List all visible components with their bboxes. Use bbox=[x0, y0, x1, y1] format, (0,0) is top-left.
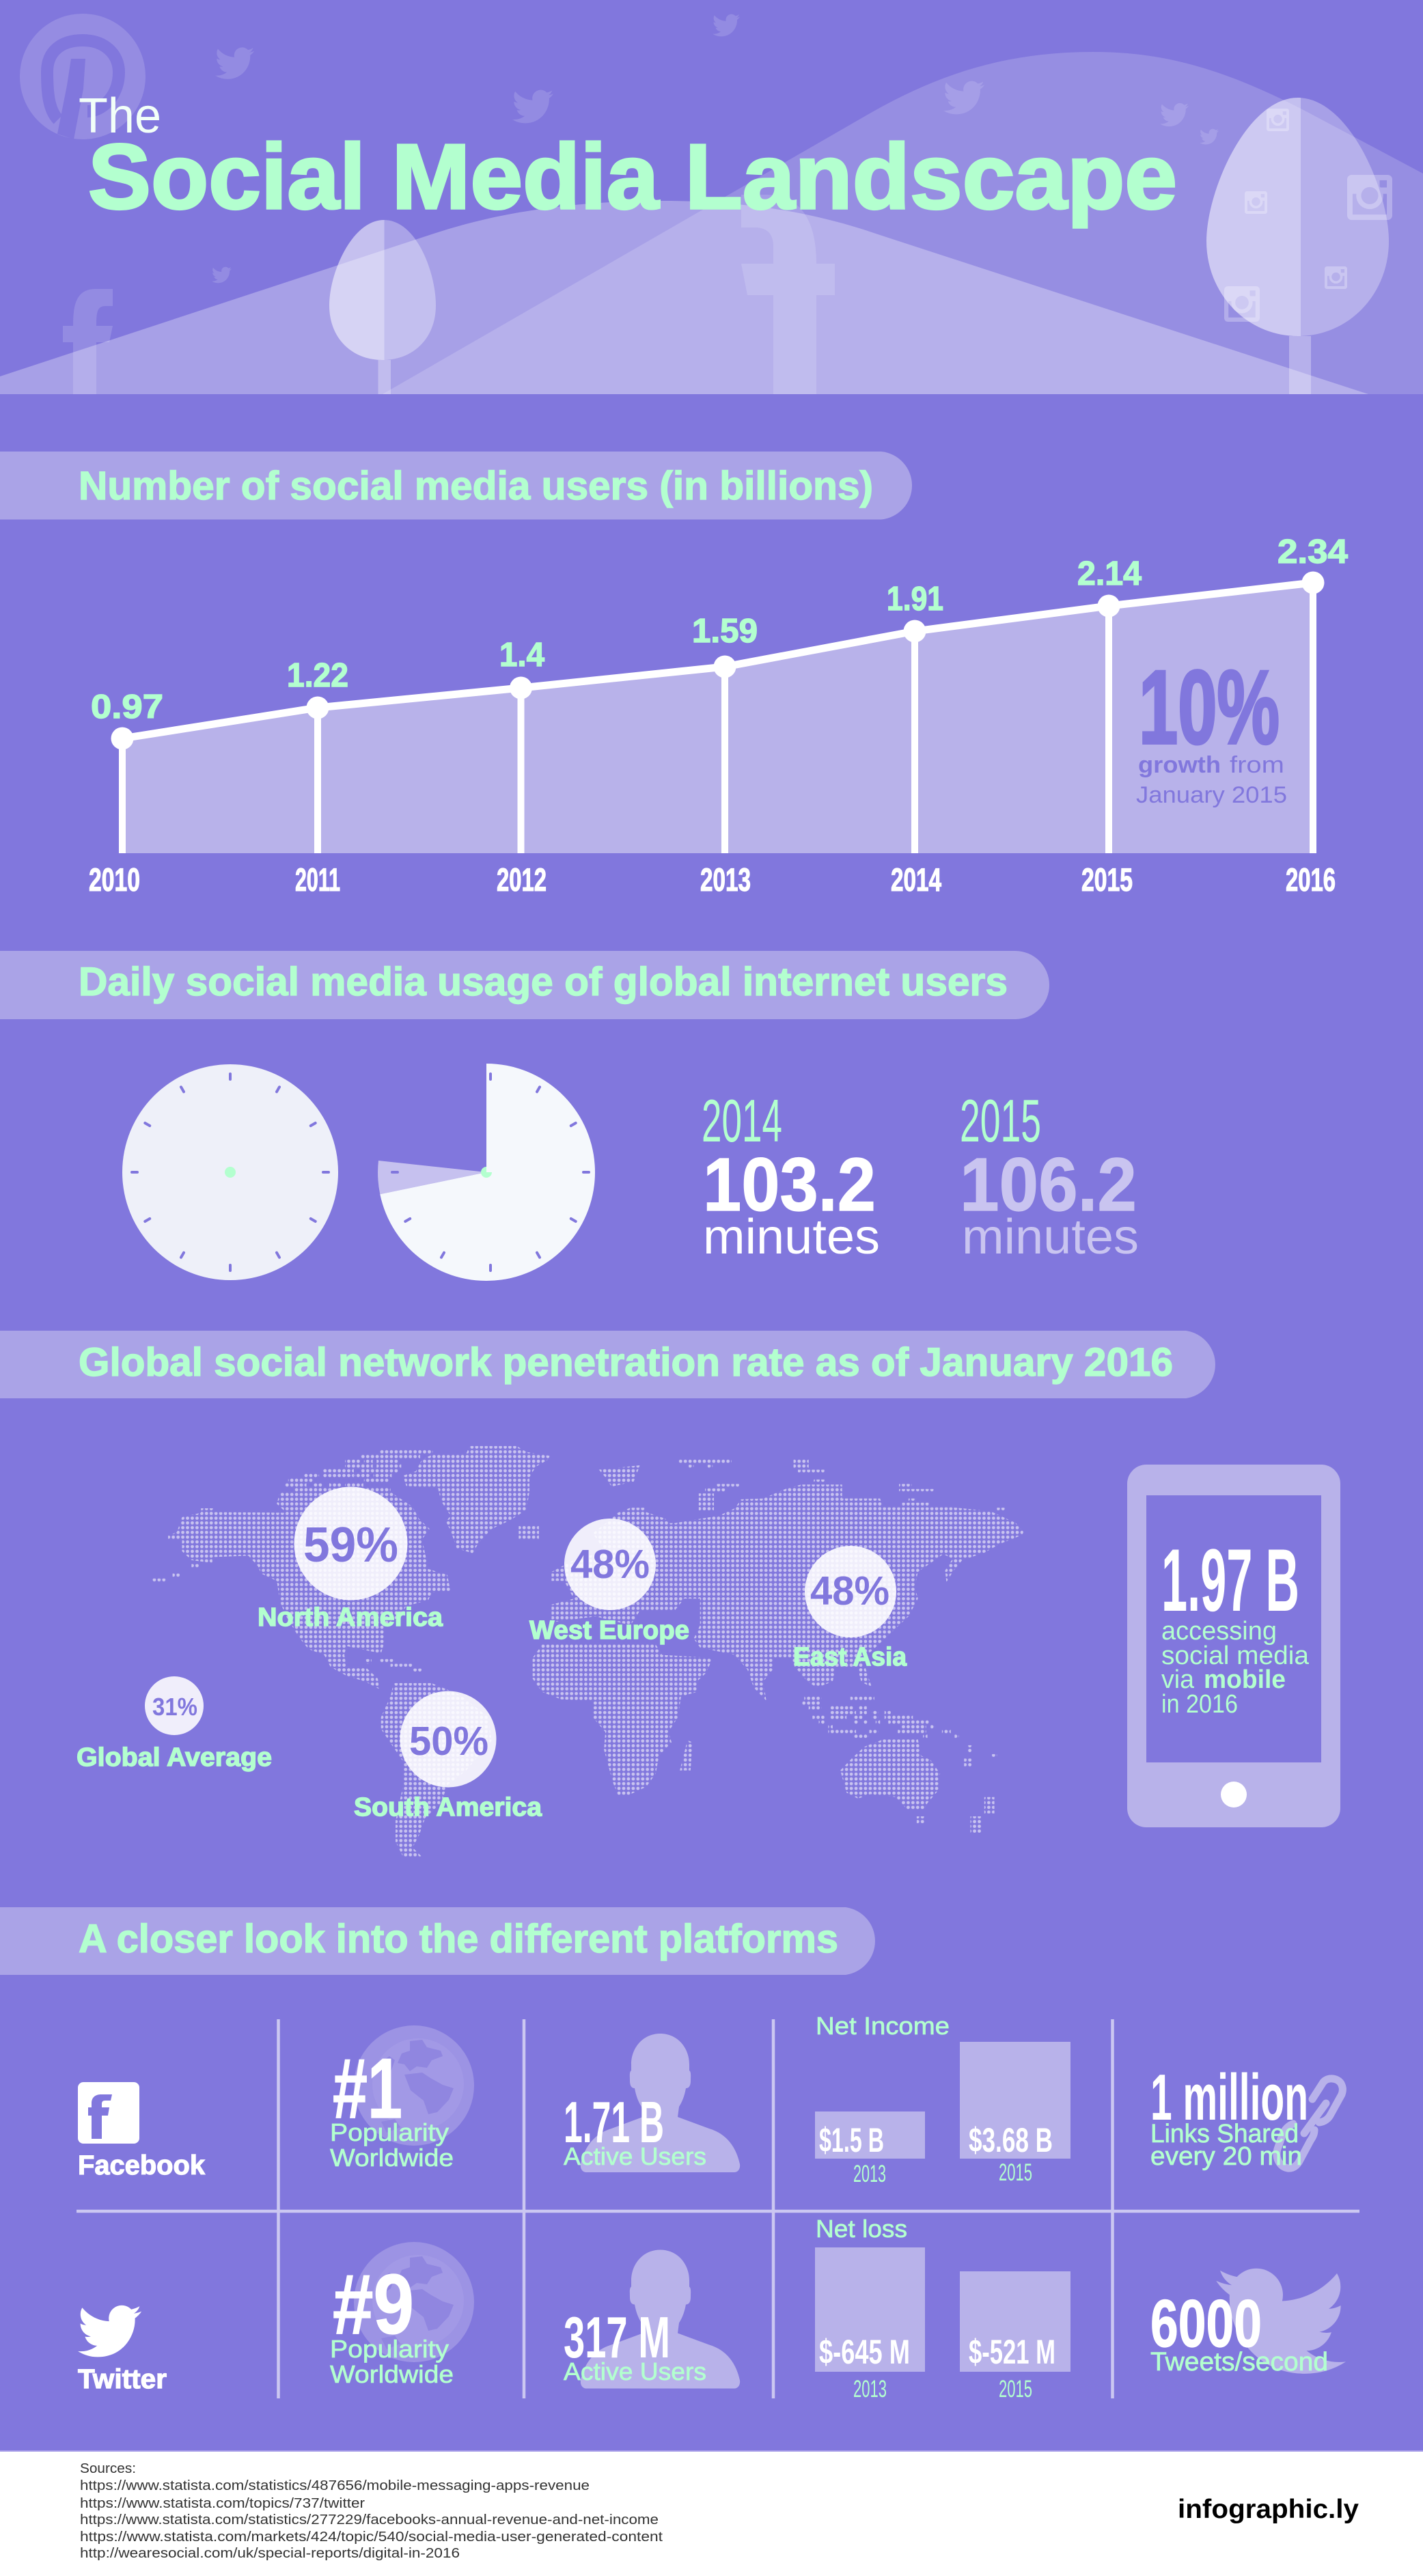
heading: daily usage bbox=[0, 951, 1049, 1019]
stat: active users 1.71 B: Active Users bbox=[564, 2142, 706, 2170]
row: Twitter bbox=[78, 2215, 1346, 2402]
year labels: 2010 bbox=[89, 861, 140, 898]
icon: person silhouette bbox=[581, 2034, 740, 2172]
tablet: mobile access: accessing bbox=[1161, 1617, 1277, 1646]
stat: popularity #9 bbox=[330, 2258, 454, 2388]
sources list: https://www.statista.com/topics/737/twitter bbox=[80, 2496, 365, 2511]
dotted world map bbox=[150, 1435, 1052, 1872]
value labels: 1.91 bbox=[887, 581, 943, 618]
tablet: mobile access bbox=[1127, 1465, 1340, 1827]
year labels: 2013 bbox=[700, 861, 751, 898]
bar chart: net income: 2013 bbox=[853, 2161, 886, 2187]
title: Social Media Landscape bbox=[88, 125, 1177, 228]
callout: West Europe 48%: 48% bbox=[570, 1542, 650, 1587]
stat: tweets per second: Tweets/second bbox=[1150, 2348, 1328, 2377]
icon: globe bbox=[354, 2242, 474, 2362]
bar chart: net loss: 2015 bbox=[999, 2376, 1032, 2402]
stat: links shared: every 20 min bbox=[1150, 2142, 1302, 2171]
small tree bbox=[329, 220, 436, 394]
callout: East Asia 48% bbox=[793, 1546, 907, 1672]
trend line bbox=[122, 583, 1313, 738]
heading: penetration rate bbox=[0, 1331, 1215, 1398]
callout: 10% growth: from bbox=[1230, 752, 1284, 778]
clock: 2014 bbox=[122, 1064, 338, 1280]
panel: header illustration bbox=[0, 14, 1423, 394]
icon: pinterest logo bbox=[20, 14, 146, 139]
title: The bbox=[79, 89, 161, 143]
callout: North America 59% bbox=[258, 1486, 443, 1632]
sources list: https://www.statista.com/statistics/277229/facebooks-annual-revenue-and-net-income bbox=[80, 2512, 659, 2527]
callout: East Asia 48%: 48% bbox=[810, 1568, 889, 1614]
stat: tweets per second: 6000 bbox=[1150, 2286, 1262, 2361]
sources list: Sources: bbox=[80, 2461, 136, 2476]
front hill bbox=[0, 201, 1368, 394]
tablet: mobile access: via bbox=[1161, 1665, 1195, 1694]
value labels: 1.4 bbox=[499, 637, 544, 674]
heading: platforms bbox=[0, 1907, 875, 1975]
icon: twitter bbox=[78, 2305, 141, 2357]
heading: number of users bbox=[0, 452, 912, 519]
data points bbox=[111, 571, 1324, 750]
callout: South America 50%: South America bbox=[354, 1793, 542, 1822]
tablet: mobile access: 1.97 B bbox=[1161, 1530, 1299, 1630]
heading: platforms: A closer look into the different platforms bbox=[79, 1917, 838, 1961]
year labels: 2016 bbox=[1286, 861, 1336, 898]
year labels: 2014 bbox=[891, 861, 941, 898]
bar chart: net income: 2015 bbox=[999, 2159, 1032, 2186]
bar chart: net loss: $-521 M bbox=[969, 2333, 1055, 2371]
stat: 2014 minutes bbox=[702, 1087, 880, 1264]
icon: person silhouette bbox=[581, 2250, 740, 2388]
callout: Global Average 31% bbox=[77, 1676, 272, 1772]
stat: active users 1.71 B: 1.71 B bbox=[564, 2090, 664, 2155]
bar chart: net income bbox=[815, 2012, 1070, 2187]
bar chart: net loss: 2013 bbox=[853, 2376, 887, 2402]
heading: daily usage: Daily social media usage of global internet users bbox=[79, 960, 1008, 1004]
callout: 10% growth bbox=[1136, 649, 1287, 808]
value labels bbox=[91, 534, 1348, 725]
label: Facebook: Facebook bbox=[78, 2150, 206, 2180]
stat: 2014 minutes: 2014 bbox=[702, 1087, 782, 1154]
line chart: social media users bbox=[89, 534, 1348, 898]
stat: 2014 minutes: 103.2 bbox=[703, 1143, 876, 1227]
callout: East Asia 48%: East Asia bbox=[793, 1643, 907, 1672]
value labels: 0.97 bbox=[91, 689, 163, 725]
stat: links shared: Links Shared bbox=[1150, 2120, 1299, 2148]
callout: Global Average 31%: 31% bbox=[152, 1693, 197, 1721]
large tree with instagram icons bbox=[1206, 98, 1392, 394]
stat: 2015 minutes: 106.2 bbox=[960, 1143, 1137, 1227]
stat: active users 317 M: 317 M bbox=[564, 2305, 670, 2370]
stat: 2015 minutes bbox=[960, 1087, 1139, 1264]
stat: links shared: 1 million bbox=[1150, 2061, 1308, 2134]
stat: tweets per second bbox=[1150, 2286, 1328, 2377]
bar chart: net income: Net Income bbox=[816, 2012, 950, 2040]
icon: chain link bbox=[1277, 2079, 1342, 2168]
stat: popularity #1: Popularity bbox=[330, 2118, 449, 2146]
tablet: mobile access: mobile bbox=[1204, 1665, 1286, 1694]
stat: popularity #1: Worldwide bbox=[330, 2144, 454, 2172]
sources list: https://www.statista.com/statistics/487656/mobile-messaging-apps-revenue bbox=[80, 2478, 590, 2493]
stat: 2014 minutes: minutes bbox=[703, 1210, 880, 1264]
callout: Global Average 31%: Global Average bbox=[77, 1743, 272, 1772]
year labels: 2011 bbox=[295, 861, 340, 898]
stat: popularity #1: #1 bbox=[333, 2042, 402, 2136]
label: Twitter: Twitter bbox=[78, 2364, 167, 2394]
callout: 10% growth: 10% bbox=[1139, 649, 1280, 766]
icon: facebook bbox=[78, 2082, 139, 2144]
stat: popularity #9: #9 bbox=[333, 2258, 414, 2352]
value labels: 1.59 bbox=[692, 613, 758, 650]
bar chart: net income: $3.68 B bbox=[969, 2121, 1053, 2159]
bar chart: net loss bbox=[815, 2215, 1070, 2402]
callout: South America 50%: 50% bbox=[409, 1719, 488, 1764]
logo: infographic.ly: infographic.ly bbox=[1178, 2495, 1359, 2524]
chart area bbox=[122, 583, 1313, 853]
value labels: 2.34 bbox=[1277, 534, 1348, 570]
year labels: 2015 bbox=[1081, 861, 1133, 898]
platform table grid bbox=[77, 2019, 1359, 2398]
stat: links shared bbox=[1150, 2061, 1308, 2171]
value labels: 1.22 bbox=[287, 657, 348, 694]
heading: penetration rate: Global social network penetration rate as of January 2016 bbox=[79, 1340, 1173, 1385]
footer bbox=[0, 2450, 1423, 2576]
year labels bbox=[89, 861, 1336, 898]
callout: 10% growth: January 2015 bbox=[1136, 782, 1287, 808]
icon: globe bbox=[354, 2025, 474, 2146]
tablet: mobile access: in 2016 bbox=[1161, 1690, 1238, 1719]
callout: West Europe 48%: West Europe bbox=[529, 1616, 689, 1645]
clock: 2015 pie bbox=[378, 1064, 595, 1281]
icon: twitter birds bbox=[212, 14, 1219, 283]
bar chart: net income: $1.5 B bbox=[819, 2121, 884, 2159]
callout: North America 59%: 59% bbox=[303, 1518, 398, 1573]
callout: West Europe 48% bbox=[529, 1519, 689, 1645]
year labels: 2012 bbox=[497, 861, 547, 898]
stat: popularity #1 bbox=[330, 2042, 454, 2172]
row: Facebook bbox=[78, 2012, 1342, 2187]
value labels: 2.14 bbox=[1077, 555, 1142, 592]
stat: popularity #9: Worldwide bbox=[330, 2360, 454, 2388]
heading: number of users: Number of social media users (in billions) bbox=[79, 464, 873, 508]
sources list: https://www.statista.com/markets/424/topic/540/social-media-user-generated-content bbox=[80, 2530, 663, 2545]
stat: 2015 minutes: 2015 bbox=[960, 1087, 1041, 1154]
stat: 2015 minutes: minutes bbox=[962, 1210, 1139, 1264]
icon: facebook f centre bbox=[741, 195, 835, 394]
bar chart: net loss: Net loss bbox=[816, 2215, 907, 2243]
icon: facebook f left bbox=[63, 289, 113, 394]
stat: active users 1.71 B bbox=[564, 2090, 706, 2170]
sources list bbox=[80, 2461, 663, 2561]
drop lines bbox=[122, 583, 1313, 853]
callout: South America 50% bbox=[354, 1691, 542, 1822]
stat: active users 317 M: Active Users bbox=[564, 2357, 706, 2385]
callout: North America 59%: North America bbox=[258, 1603, 443, 1632]
callout: 10% growth: growth bbox=[1138, 752, 1221, 778]
bar chart: net loss: $-645 M bbox=[819, 2333, 910, 2371]
back hill bbox=[383, 52, 1423, 394]
tablet: mobile access: social media bbox=[1161, 1642, 1310, 1670]
sources list: http://wearesocial.com/uk/special-reports/digital-in-2016 bbox=[80, 2546, 460, 2561]
stat: popularity #9: Popularity bbox=[330, 2335, 449, 2363]
icon: large twitter bird bbox=[1216, 2269, 1346, 2374]
